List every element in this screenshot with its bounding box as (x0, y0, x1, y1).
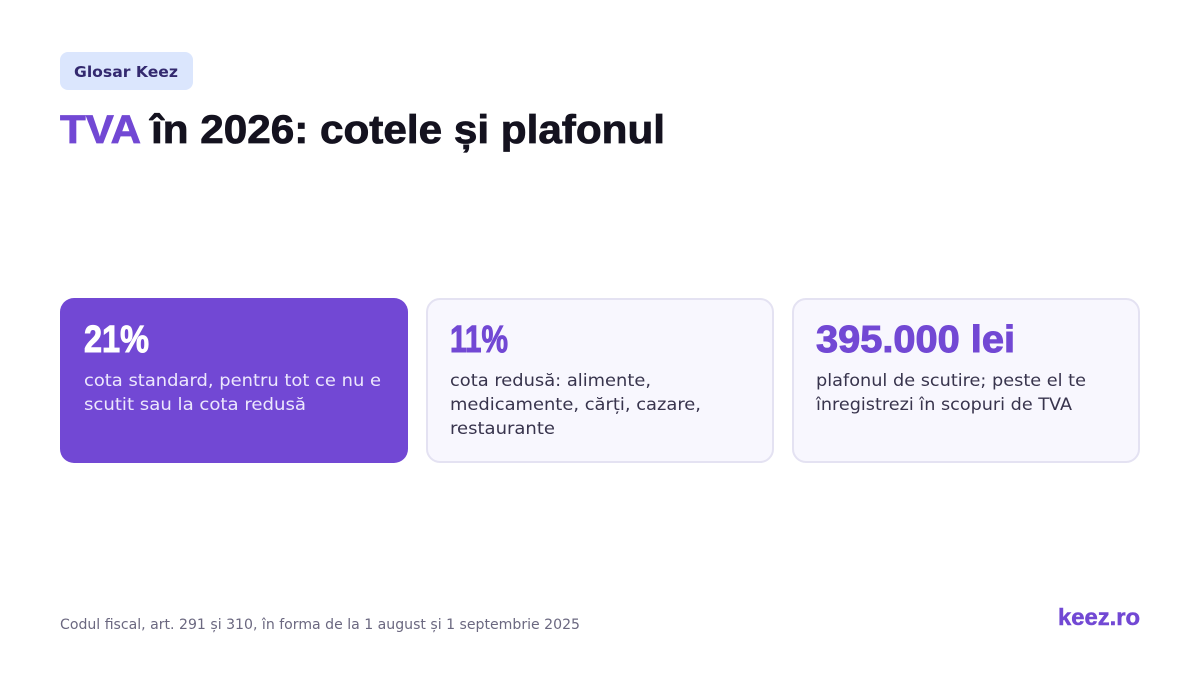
description: standard rate: scutit sau la cota redusă (84, 395, 306, 415)
stat: 395.000 lei: 395.000 lei (816, 319, 1015, 361)
description: exemption threshold: înregistrezi în scopuri de TVA (815, 395, 1072, 415)
description: reduced rate: cota redusă: alimente, (450, 371, 651, 391)
panel: 395.000 lei threshold (793, 299, 1139, 462)
stat: 11%: 11% (450, 319, 508, 361)
badge: Glosar Keez: Glosar Keez (74, 63, 178, 81)
description: reduced rate (450, 371, 701, 439)
title: în 2026: cotele și plafonul (149, 108, 665, 152)
badge: Glosar Keez (60, 52, 193, 90)
footer source note: Codul fiscal, art. 291 și 310, în forma de la 1 august și 1 septembrie 2025 (60, 617, 580, 633)
brand: keez.ro: keez.ro (1058, 604, 1140, 630)
description: standard rate (84, 371, 381, 415)
title: TVA (60, 108, 141, 152)
description: exemption threshold (815, 371, 1086, 415)
panel: 21% standard rate (60, 298, 408, 463)
description: standard rate: cota standard, pentru tot ce nu e (84, 371, 381, 391)
description: reduced rate: restaurante (450, 419, 555, 439)
stat: 21%: 21% (84, 319, 149, 361)
description: reduced rate: medicamente, cărți, cazare, (450, 395, 701, 415)
description: exemption threshold: plafonul de scutire; peste el te (816, 371, 1086, 391)
panel: 11% reduced rate (427, 299, 773, 462)
